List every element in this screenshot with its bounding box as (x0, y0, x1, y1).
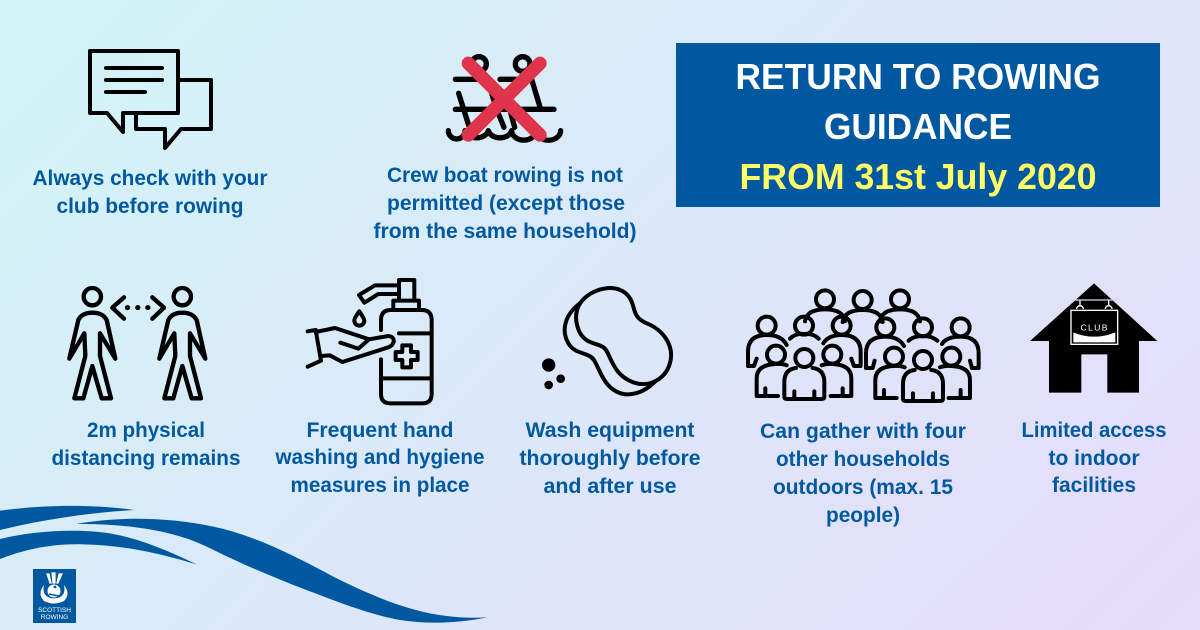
icon: club house (1030, 283, 1157, 393)
text: check with club: Always check with your (32, 167, 268, 190)
logo: Scottish Rowing (33, 569, 76, 623)
icon: chat bubbles (90, 51, 211, 148)
text: crew boat rule: from the same household) (374, 220, 636, 243)
text: crew boat rule: Crew boat rowing is not (387, 164, 623, 187)
icon: hand sanitiser (308, 280, 432, 403)
text: wash equipment: Wash equipment (526, 419, 695, 442)
text: check with club: club before rowing (56, 195, 244, 218)
title panel (676, 43, 1160, 207)
text: indoor facilities: to indoor (1048, 447, 1140, 470)
text: indoor facilities (1022, 419, 1166, 497)
icon: physical distancing (69, 288, 205, 398)
text: gather outdoors: Can gather with four (760, 420, 966, 443)
text: crew boat rule: permitted (except those (387, 192, 625, 215)
title panel: GUIDANCE (824, 106, 1012, 147)
icon: crowd of people (748, 290, 979, 401)
text: hand washing: measures in place (290, 474, 470, 497)
text: indoor facilities: Limited access (1022, 419, 1166, 442)
title panel: FROM 31st July 2020 (740, 156, 1096, 197)
text: wash equipment: thoroughly before (520, 447, 700, 470)
text: check with club (32, 167, 268, 218)
logo: Scottish Rowing: ROWING (41, 614, 68, 621)
text: distancing: 2m physical (87, 419, 205, 442)
text: indoor facilities: facilities (1052, 474, 1136, 497)
title panel: RETURN TO ROWING (736, 56, 1100, 97)
icon: club house: CLUB (1080, 322, 1109, 332)
logo: Scottish Rowing: SCOTTISH (38, 607, 71, 614)
text: gather outdoors: outdoors (max. 15 (773, 476, 953, 499)
text: hand washing: washing and hygiene (275, 446, 484, 469)
waves decoration (0, 506, 487, 623)
text: distancing (52, 419, 240, 470)
text: wash equipment (520, 419, 700, 498)
text: crew boat rule (374, 164, 636, 243)
icon: sponge (542, 288, 671, 394)
text: gather outdoors (760, 420, 966, 527)
text: hand washing: Frequent hand (306, 419, 454, 442)
text: gather outdoors: people) (826, 504, 900, 527)
text: wash equipment: and after use (544, 475, 676, 498)
text: hand washing (275, 419, 484, 497)
icon: crew boat crossed out (448, 57, 561, 140)
text: distancing: distancing remains (52, 447, 240, 470)
text: gather outdoors: other households (776, 448, 950, 471)
